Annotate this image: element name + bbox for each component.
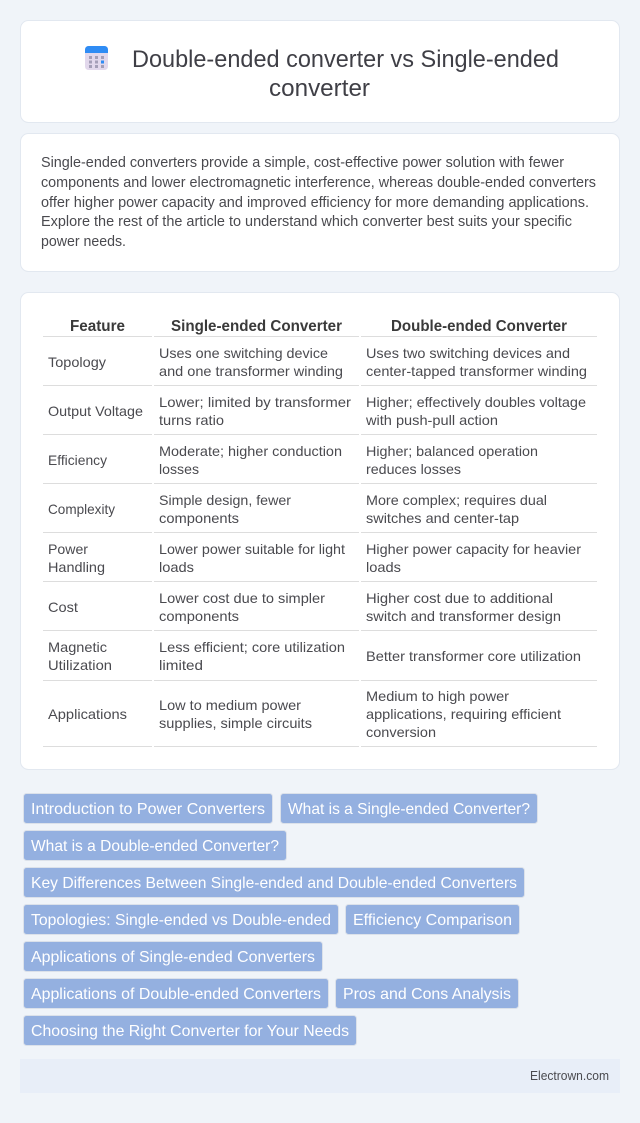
text block: intro paragraph: Explore the rest of the article to understand which converter best suits your specific <box>41 214 572 230</box>
table row: output voltage: Higher; effectively doubles voltage <box>366 394 586 410</box>
table row: efficiency: reduces losses <box>366 461 461 477</box>
title <box>132 46 559 102</box>
footer: Electrown.com <box>530 1069 609 1083</box>
table row: power handling <box>48 541 581 575</box>
tag: double-ended applications <box>24 978 328 1008</box>
panel: header <box>20 20 620 122</box>
table row: power handling: Higher power capacity for heavier <box>366 541 581 557</box>
tag: key differences: Key Differences Between Single-ended and Double-ended Converters <box>31 875 517 892</box>
table row: cost <box>48 590 561 624</box>
table row: cost: switch and transformer design <box>366 608 561 624</box>
tag: double-ended applications: Applications of Double-ended Converters <box>31 986 321 1003</box>
table row: output voltage <box>48 394 586 428</box>
table row: applications: Applications <box>48 706 127 722</box>
footer <box>20 1059 620 1093</box>
table row: efficiency: Efficiency <box>48 452 107 468</box>
tag: pros and cons <box>336 978 518 1008</box>
table header row: Feature <box>70 318 125 335</box>
text block: intro paragraph: power needs. <box>41 234 126 250</box>
table row: complexity: switches and center-tap <box>366 510 519 526</box>
tag: single-ended applications <box>24 942 322 972</box>
table row: topology: Topology <box>48 354 106 370</box>
table row: magnetic utilization: Magnetic <box>48 639 107 655</box>
title: Double-ended converter vs Single-ended <box>132 46 559 73</box>
table row: topology: Uses two switching devices and <box>366 345 570 361</box>
table row: power handling: Lower power suitable for light <box>159 541 345 557</box>
table row: magnetic utilization: Better transformer core utilization <box>366 648 581 664</box>
tag: key differences <box>24 868 524 898</box>
tag: double-ended <box>24 830 286 860</box>
table row: power handling: loads <box>159 559 194 575</box>
title: converter <box>269 75 370 102</box>
table row: applications: supplies, simple circuits <box>159 715 312 731</box>
tag: choosing <box>24 1016 356 1046</box>
tag: topologies <box>24 904 338 934</box>
table row: cost: Higher cost due to additional <box>366 590 553 606</box>
table header row: Double-ended Converter <box>391 318 567 335</box>
tag: single-ended applications: Applications of Single-ended Converters <box>31 949 315 966</box>
table row: complexity: More complex; requires dual <box>366 492 547 508</box>
table row: cost: components <box>159 608 239 624</box>
table row: magnetic utilization: limited <box>159 657 203 673</box>
table row: topology: center-tapped transformer winding <box>366 363 587 379</box>
text block: intro paragraph: offer higher power capacity and improved efficiency for more demanding applications. <box>41 195 589 211</box>
table row: output voltage: Lower; limited by transformer <box>159 394 351 410</box>
table row: complexity <box>48 492 547 526</box>
tag: pros and cons: Pros and Cons Analysis <box>343 986 511 1003</box>
table row: complexity: Simple design, fewer <box>159 492 291 508</box>
table row: topology <box>48 345 587 379</box>
table row: cost: Cost <box>48 599 78 615</box>
table row: topology: and one transformer winding <box>159 363 343 379</box>
table row: complexity: Complexity <box>48 501 115 517</box>
table row: cost: Lower cost due to simpler <box>159 590 325 606</box>
panel: introduction <box>20 134 620 272</box>
text block: intro paragraph: components and lower electromagnetic interference, whereas double-ended converters <box>41 175 596 191</box>
table row: efficiency <box>48 443 538 477</box>
table row: complexity: components <box>159 510 239 526</box>
table row: output voltage: turns ratio <box>159 412 224 428</box>
table row: output voltage: with push-pull action <box>365 412 498 428</box>
table row: applications: conversion <box>366 724 436 740</box>
table row: efficiency: Higher; balanced operation <box>366 443 538 459</box>
table row: power handling: loads <box>366 559 401 575</box>
table header row: Single-ended Converter <box>171 318 342 335</box>
table row: efficiency: losses <box>159 461 199 477</box>
table row: applications: Low to medium power <box>159 697 301 713</box>
table row: applications: applications, requiring efficient <box>366 706 561 722</box>
table row: magnetic utilization: Less efficient; core utilization <box>159 639 345 655</box>
table row: output voltage: Output Voltage <box>48 403 143 419</box>
panel: comparison table <box>20 292 620 770</box>
table row: applications <box>48 688 561 740</box>
text block: intro paragraph: Single-ended converters provide a simple, cost-effective power solution with fewer <box>41 155 564 171</box>
tag: introduction: Introduction to Power Converters <box>31 801 265 818</box>
tag: double-ended: What is a Double-ended Converter? <box>31 838 279 855</box>
table row: magnetic utilization <box>48 639 581 673</box>
table header row <box>70 318 567 335</box>
table row: magnetic utilization: Utilization <box>48 657 112 673</box>
tag: single-ended <box>280 794 538 824</box>
table row: power handling: Handling <box>48 559 105 575</box>
tag: efficiency: Efficiency Comparison <box>353 912 512 929</box>
table row: efficiency: Moderate; higher conduction <box>159 443 342 459</box>
panel: topic tags <box>24 794 538 1046</box>
tag: choosing: Choosing the Right Converter for Your Needs <box>31 1023 349 1040</box>
text block: intro paragraph <box>41 155 596 250</box>
icon: calendar grid <box>85 46 108 70</box>
table row: power handling: Power <box>48 541 88 557</box>
table row: applications: Medium to high power <box>366 688 509 704</box>
tag: efficiency <box>346 904 520 934</box>
tag: single-ended: What is a Single-ended Converter? <box>288 801 530 818</box>
tag: topologies: Topologies: Single-ended vs Double-ended <box>31 912 331 929</box>
tag: introduction <box>24 794 272 824</box>
table row: topology: Uses one switching device <box>159 345 328 361</box>
